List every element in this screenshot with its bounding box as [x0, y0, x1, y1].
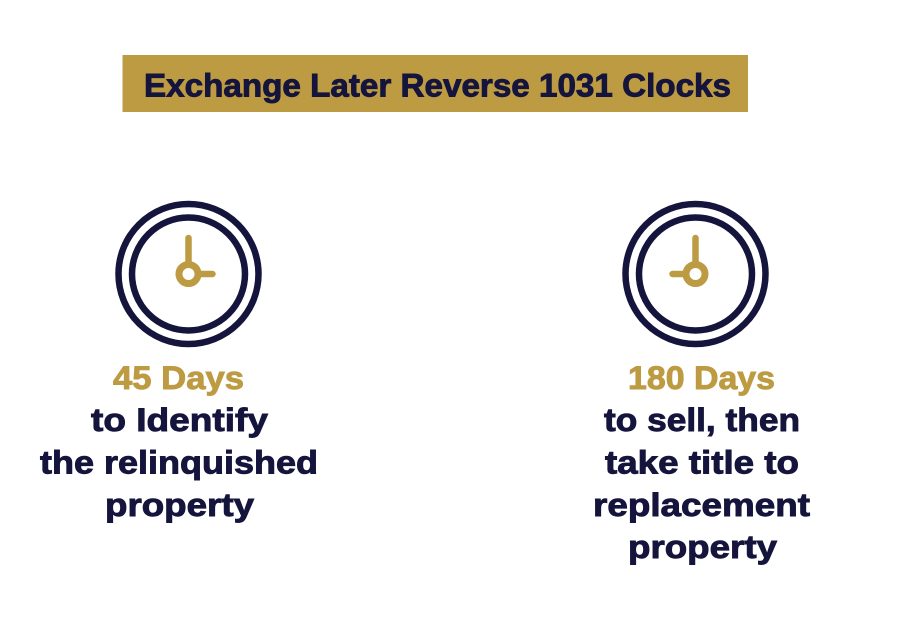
text block: 180 days: take title to: [605, 444, 799, 480]
icon: 45 day clock: [118, 204, 258, 344]
title banner: [122, 55, 748, 112]
text block: 180 days: to sell, then: [604, 402, 800, 438]
text block: 180 days: replacement: [593, 487, 810, 523]
title: Exchange Later Reverse 1031 Clocks: [144, 68, 731, 104]
text block: 180 days: [593, 360, 810, 565]
icon: 180 day clock: [626, 204, 766, 344]
text block: 45 days: property: [105, 487, 254, 523]
text block: 45 days: 45 Days: [113, 360, 244, 396]
text block: 180 days: 180 Days: [628, 360, 775, 396]
text block: 45 days: to Identify: [91, 402, 268, 438]
text block: 180 days: property: [628, 529, 777, 565]
text block: 45 days: the relinquished: [40, 444, 318, 480]
text block: 45 days: [40, 360, 318, 523]
